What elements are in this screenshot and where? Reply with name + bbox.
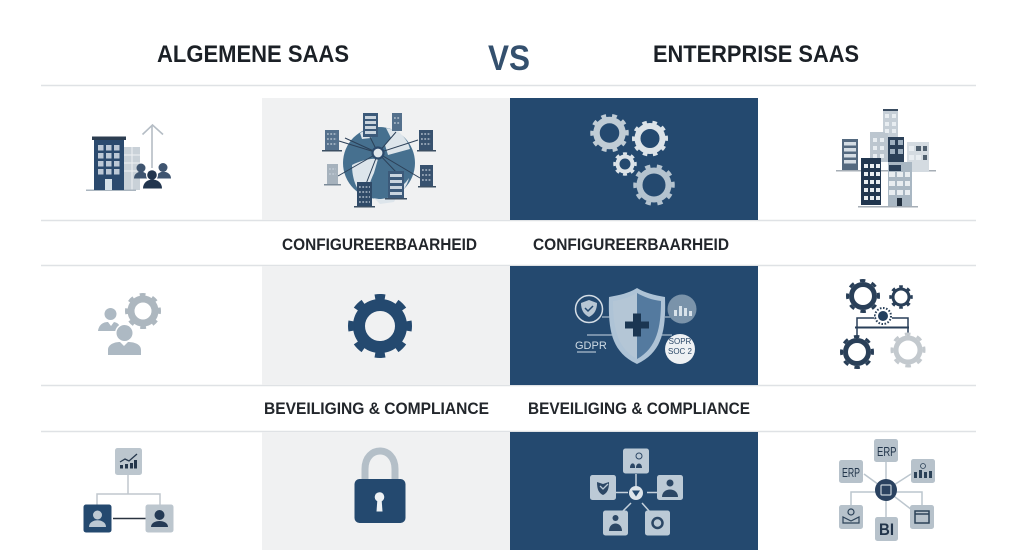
- panel: dark row 1: [510, 98, 758, 220]
- icon: connected gears: [842, 280, 924, 368]
- icon: hub network on dark: [590, 448, 683, 536]
- panel: light row 2: [262, 266, 510, 385]
- text: SOPR SOC 2: [668, 337, 693, 356]
- label: beveiliging left: BEVEILIGING & COMPLIANCE: [264, 399, 489, 418]
- title: Enterprise SaaS: ENTERPRISE SAAS: [653, 41, 859, 68]
- label: beveiliging right: BEVEILIGING & COMPLIANCE: [528, 399, 750, 418]
- text: SOPR SOC 2: SOPR: [669, 337, 692, 346]
- label: configureerbaarheid right: CONFIGUREERBAARHEID: [533, 235, 729, 254]
- icon: globe with connected buildings: [322, 113, 436, 208]
- text: ERP top: ERP: [877, 444, 896, 459]
- title: Algemene SaaS: ALGEMENE SAAS: [157, 41, 349, 68]
- icon: padlock: [354, 451, 406, 523]
- icon: four gears on dark: [592, 116, 673, 204]
- text: SOPR SOC 2: SOC 2: [668, 347, 693, 356]
- title: VS: VS: [488, 39, 530, 78]
- text: ERP left: ERP: [842, 465, 860, 480]
- icon: enterprise skyline: [836, 109, 936, 208]
- icon: integration hub ERP BI: [839, 439, 935, 541]
- label: configureerbaarheid left: CONFIGUREERBAARHEID: [282, 235, 477, 254]
- icon: org chart with analytics: [84, 448, 174, 532]
- panel: light row 3: [262, 432, 510, 550]
- icon: people with gear: [98, 294, 160, 355]
- text: GDPR: GDPR: [575, 340, 607, 352]
- icon: large gear: [351, 297, 409, 355]
- panel: dark row 3: [510, 432, 758, 550]
- panel: dark row 2: [510, 266, 758, 385]
- text: BI: BI: [879, 520, 894, 539]
- icon: office building with people and arrow: [86, 125, 171, 191]
- icon: shield with compliance badges: [575, 288, 696, 364]
- panel: light row 1: [262, 98, 510, 220]
